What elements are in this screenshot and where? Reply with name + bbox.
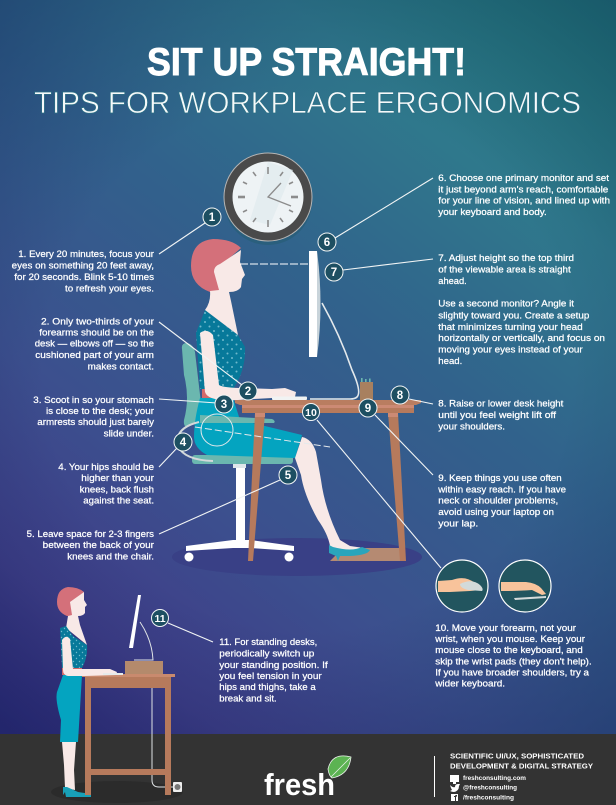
tip 7 text: 7. Adjust height so the top third: [438, 253, 574, 264]
tip 4 text: knees, back flush: [80, 485, 154, 496]
tip 2 text: desk — elbows off — so the: [35, 339, 154, 350]
illustration: footrest: [330, 548, 406, 561]
tip 3 text: [33, 395, 155, 440]
marker 1: [203, 208, 221, 226]
marker 9: 9: [365, 403, 371, 415]
tip 6 text: it just beyond arm's reach, comfortable: [438, 184, 608, 195]
tip 9 text: 9. Keep things you use often: [438, 473, 562, 484]
lower leg: [295, 437, 364, 553]
footer tagline: DEVELOPMENT & DIGITAL STRATEGY: [450, 762, 593, 770]
illustration: seated desk: [235, 400, 421, 561]
illustration: keyboard: [272, 396, 307, 400]
tip 11 text: you feel tension in your: [219, 671, 323, 682]
footer tagline: [450, 752, 593, 770]
marker 7: [325, 263, 343, 281]
tip 1 text: for 20 seconds. Blink 5-10 times: [14, 272, 154, 283]
dress top: [196, 310, 245, 389]
illustration: office chair: [182, 343, 294, 562]
tip 7 text: slightly toward you. Create a setup: [438, 311, 589, 322]
tip 7 text: ahead.: [438, 276, 467, 287]
footer contact: twitter: @freshconsulting: [463, 784, 517, 792]
illustration: standing woman: [51, 587, 183, 803]
tip 7 text: of the viewable area is straight: [438, 265, 571, 276]
marker 2: 2: [245, 386, 251, 398]
marker 4: 4: [180, 437, 187, 449]
tip 3 text: slide under.: [104, 429, 154, 440]
tip 1 text: 1. Every 20 minutes, focus your: [18, 249, 155, 260]
tip 4 text: [58, 462, 155, 507]
hair: [191, 239, 241, 292]
footer contact: website: freshconsulting.com: [463, 775, 526, 782]
tip 10 text: If you have broader shoulders, try a: [435, 668, 590, 679]
tip 10 text: wrist, when you mouse. Keep your: [434, 634, 586, 645]
footer tagline: SCIENTIFIC UI/UX, SOPHISTICATED: [450, 752, 585, 760]
marker 5: [279, 466, 297, 484]
tip 1 text: [12, 249, 155, 294]
title: SIT UP STRAIGHT!: [147, 41, 466, 84]
marker 8: [391, 386, 409, 404]
marker 3: [215, 395, 233, 413]
tip 3 text: 3. Scoot in so your stomach: [33, 395, 154, 406]
tip 11 text: 11. For standing desks,: [219, 637, 317, 648]
hip angle marker: [177, 414, 330, 461]
tip 10 text: wider keyboard.: [434, 679, 505, 690]
tip 5 text: 5. Leave space for 2-3 fingers: [27, 529, 154, 540]
tip 5 text: knees and the chair.: [67, 552, 154, 563]
tip 10 text: mouse close to the keyboard, and: [435, 645, 583, 656]
marker 11: [152, 610, 168, 626]
tip 2 text: forearms should be on the: [39, 328, 154, 339]
neck, chest and face: [205, 250, 245, 335]
tip 9 text: [437, 473, 566, 529]
illustration: standing woman's arm: [62, 637, 123, 676]
marker 8: 8: [397, 390, 404, 402]
footer contact: facebook: /freshconsulting: [463, 794, 514, 802]
tip 1 text: to refresh your eyes.: [65, 284, 154, 294]
belt: [202, 388, 234, 398]
shoe: [329, 545, 370, 561]
icon: wall clock: [224, 153, 312, 245]
tip 8 text: your shoulders.: [438, 421, 505, 432]
logo: fresh: [264, 756, 351, 802]
footer divider: [434, 756, 436, 797]
tip 7 text: moving your eyes instead of your: [438, 344, 584, 355]
tip 2 text: [35, 317, 155, 373]
footer band: [0, 734, 616, 805]
tip 4 text: 4. Your hips should be: [58, 462, 154, 473]
tip 9 text: neck or shoulder problems,: [438, 496, 558, 507]
illustration: seated woman: [191, 239, 370, 561]
tip 7 text: that minimizes turning your head: [438, 322, 583, 333]
skirt: [194, 398, 302, 458]
marker 4: [174, 433, 192, 451]
marker 5: 5: [285, 470, 292, 482]
marker 2: [239, 382, 257, 400]
tip 11 text: periodically switch up: [219, 649, 314, 660]
tip 8 text: 8. Raise or lower desk height: [438, 399, 564, 410]
leader lines: [159, 178, 441, 642]
tip 5 text: between the back of your: [43, 540, 155, 551]
tip 8 text: [438, 399, 564, 432]
tip 7 text: Use a second monitor? Angle it: [438, 299, 574, 310]
tip 8 text: until you feel weight lift off: [438, 410, 556, 421]
marker 10: [302, 404, 320, 420]
tip 7 text: head.: [438, 356, 462, 367]
illustration: pencil cup: [360, 378, 373, 400]
tip 11 text: your standing position. If: [219, 660, 328, 671]
footer contact: website: [450, 775, 526, 784]
sight line: [240, 263, 308, 265]
tip 10 text: 10. Move your forearm, not your: [435, 623, 577, 634]
tip 5 text: [27, 529, 155, 563]
icon: correct mouse forearm: [436, 560, 488, 612]
marker 9: [359, 399, 377, 417]
illustration: standing desk: [82, 595, 182, 795]
marker 10: 10: [305, 407, 317, 419]
marker 11: 11: [154, 613, 166, 625]
tip 2 text: cushioned part of your arm: [35, 350, 154, 361]
footer contact: twitter: [450, 784, 517, 792]
tip 2 text: makes contact.: [88, 362, 154, 373]
subtitle: TIPS FOR WORKPLACE ERGONOMICS: [34, 85, 581, 120]
marker 6: 6: [324, 237, 330, 249]
armrest: [200, 415, 275, 423]
tip 6 text: your keyboard and body.: [438, 207, 547, 218]
tip 2 text: 2. Only two-thirds of your: [41, 317, 155, 328]
tip 10 text: [434, 623, 592, 690]
tip 9 text: your lap.: [438, 518, 478, 529]
tip 3 text: is close to the desk; your: [46, 406, 155, 417]
tip 7 text: [438, 253, 605, 367]
tip 11 text: hips and thighs, take a: [219, 682, 316, 693]
tip 4 text: higher than your: [81, 473, 155, 484]
tip 1 text: eyes on something 20 feet away,: [12, 260, 154, 272]
tip 6 text: [438, 173, 610, 218]
illustration: monitor: [309, 251, 359, 399]
marker 1: 1: [209, 212, 216, 224]
logo: fresh: fresh: [264, 767, 335, 802]
tip 11 text: [219, 637, 328, 705]
icon: wrist on keyboard: [499, 560, 551, 612]
tip 4 text: against the seat.: [83, 496, 154, 507]
tip 6 text: 6. Choose one primary monitor and set: [438, 173, 609, 184]
floor shadow: [172, 538, 422, 576]
tip 10 text: skip the wrist pads (they don't help).: [435, 657, 592, 668]
tip 9 text: within easy reach. If you have: [437, 484, 566, 495]
arm: [200, 331, 296, 400]
tip 6 text: for your line of vision, and lined up with: [438, 196, 610, 207]
tip 9 text: avoid using your laptop on: [438, 507, 554, 518]
tip 7 text: horizontally or vertically, and focus on: [438, 333, 605, 344]
marker 6: [318, 233, 336, 251]
tip 11 text: break and sit.: [219, 694, 277, 705]
marker 7: 7: [331, 267, 337, 279]
marker 3: 3: [221, 399, 227, 411]
tip 3 text: armrests should just barely: [37, 417, 154, 428]
